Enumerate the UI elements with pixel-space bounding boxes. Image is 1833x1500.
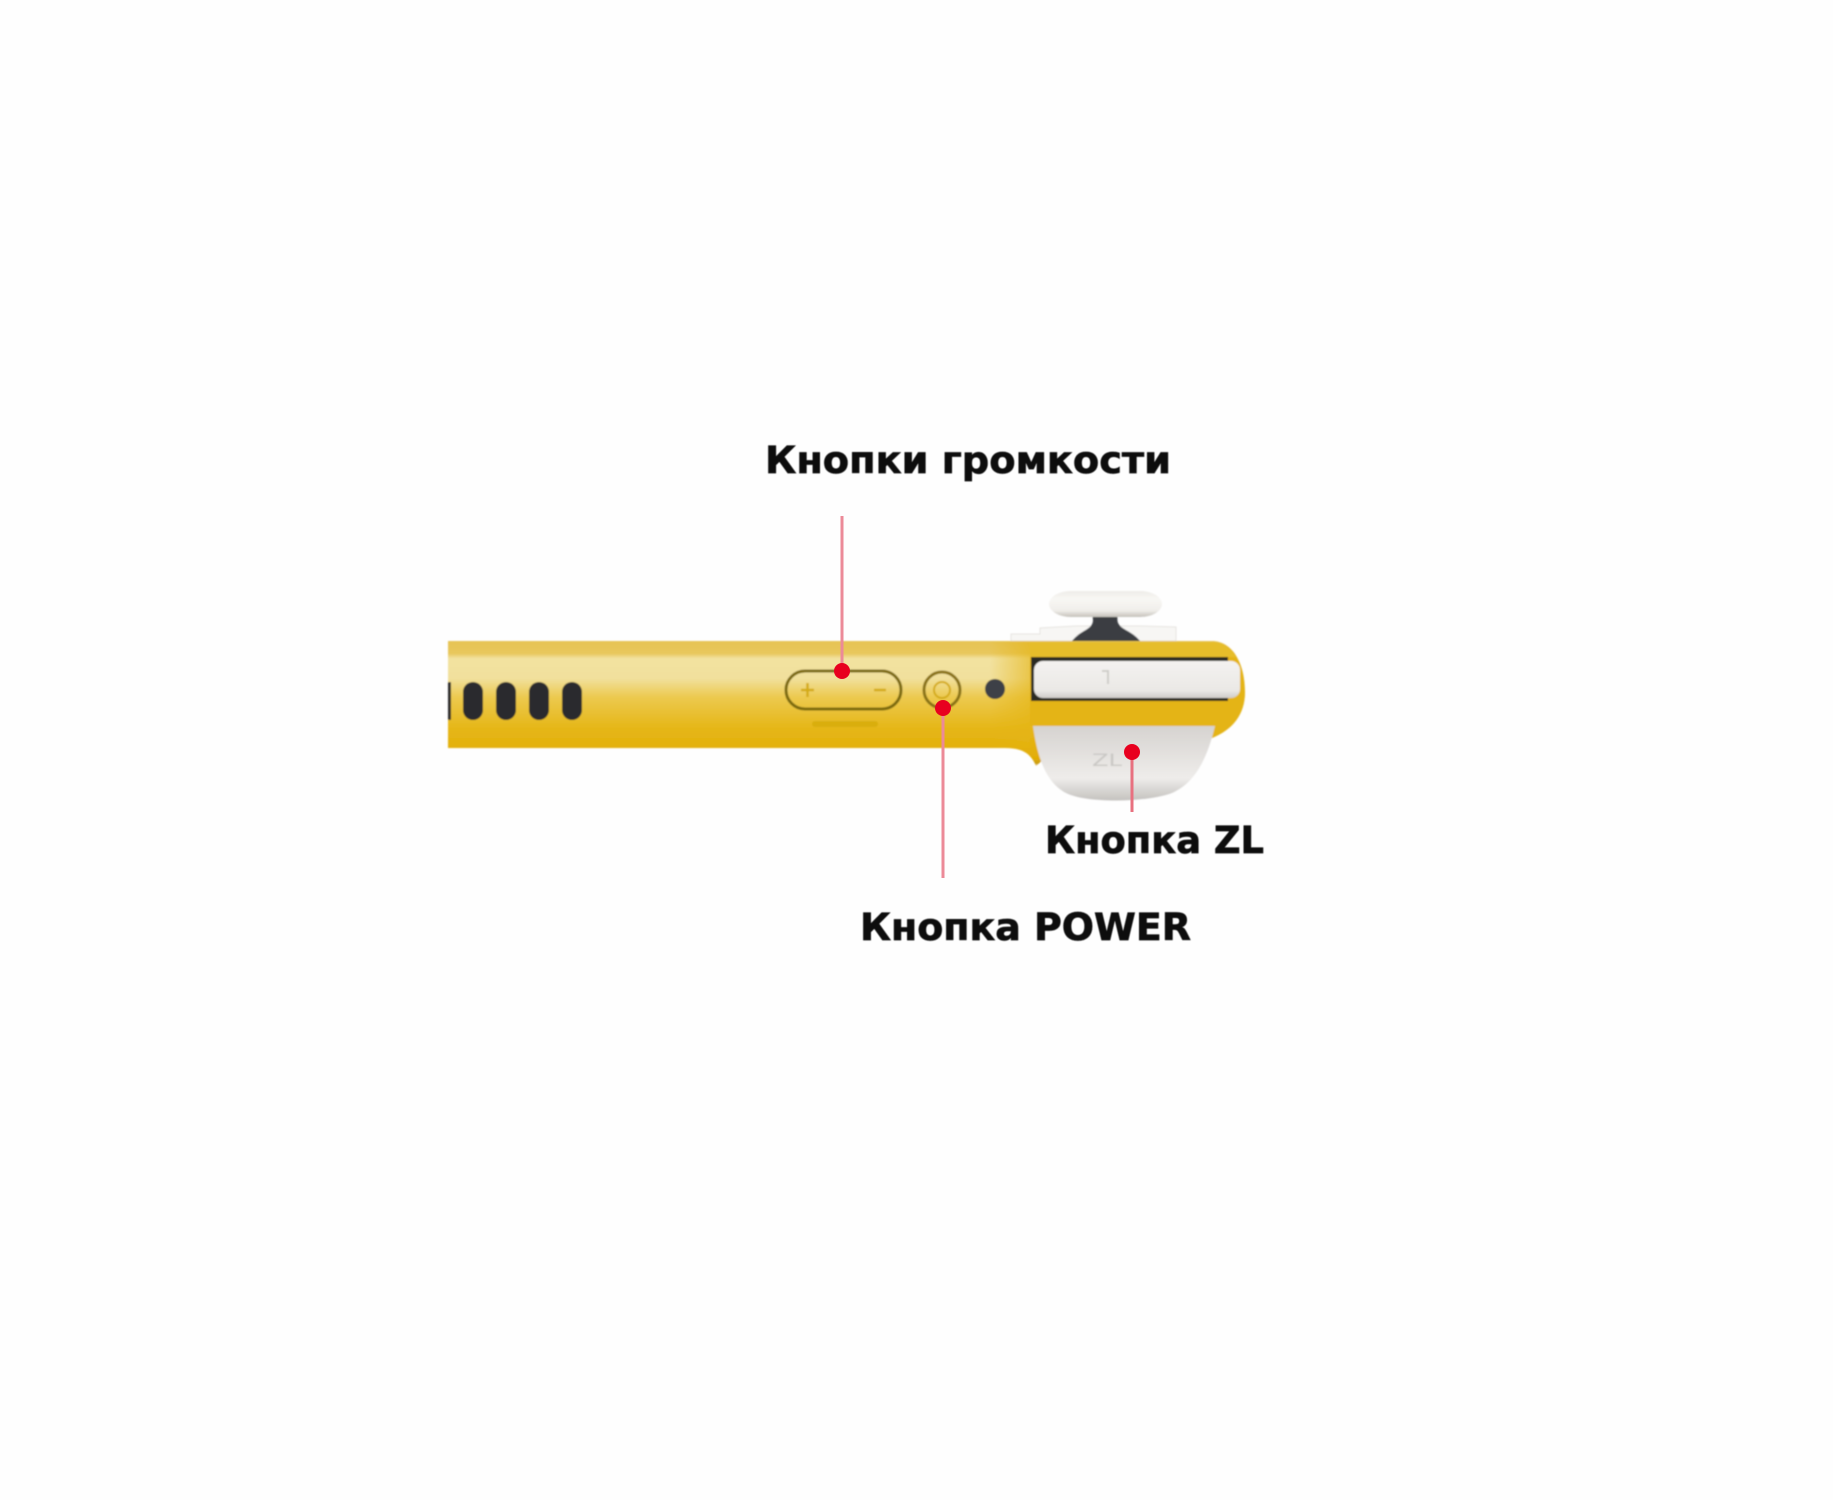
callout line: volume — [840, 516, 844, 671]
device illustration — [448, 591, 1245, 800]
label: ZL button: Кнопка ZL — [1045, 819, 1264, 862]
callout: power button — [860, 700, 1191, 949]
callout dot: power — [935, 700, 951, 716]
icon: ZL trigger — [1033, 726, 1215, 800]
callout: ZL button — [1045, 744, 1264, 862]
label: power button: Кнопка POWER — [860, 906, 1191, 949]
device body — [448, 641, 1245, 766]
icon: volume rocker — [786, 671, 901, 727]
callout dot: ZL — [1124, 744, 1140, 760]
icon: ZL trigger: ZL — [1092, 751, 1123, 771]
callout dot: volume — [834, 663, 850, 679]
icon: analog stick — [1011, 591, 1176, 641]
icon: speaker slots — [448, 682, 582, 720]
callout line: power — [942, 708, 944, 878]
icon: power button — [924, 672, 960, 708]
icon: LED — [985, 679, 1005, 699]
label: volume buttons: Кнопки громкости — [765, 439, 1171, 482]
callout line: ZL — [1130, 752, 1134, 812]
icon: L button — [1031, 657, 1240, 701]
callout: volume buttons — [765, 439, 1171, 679]
